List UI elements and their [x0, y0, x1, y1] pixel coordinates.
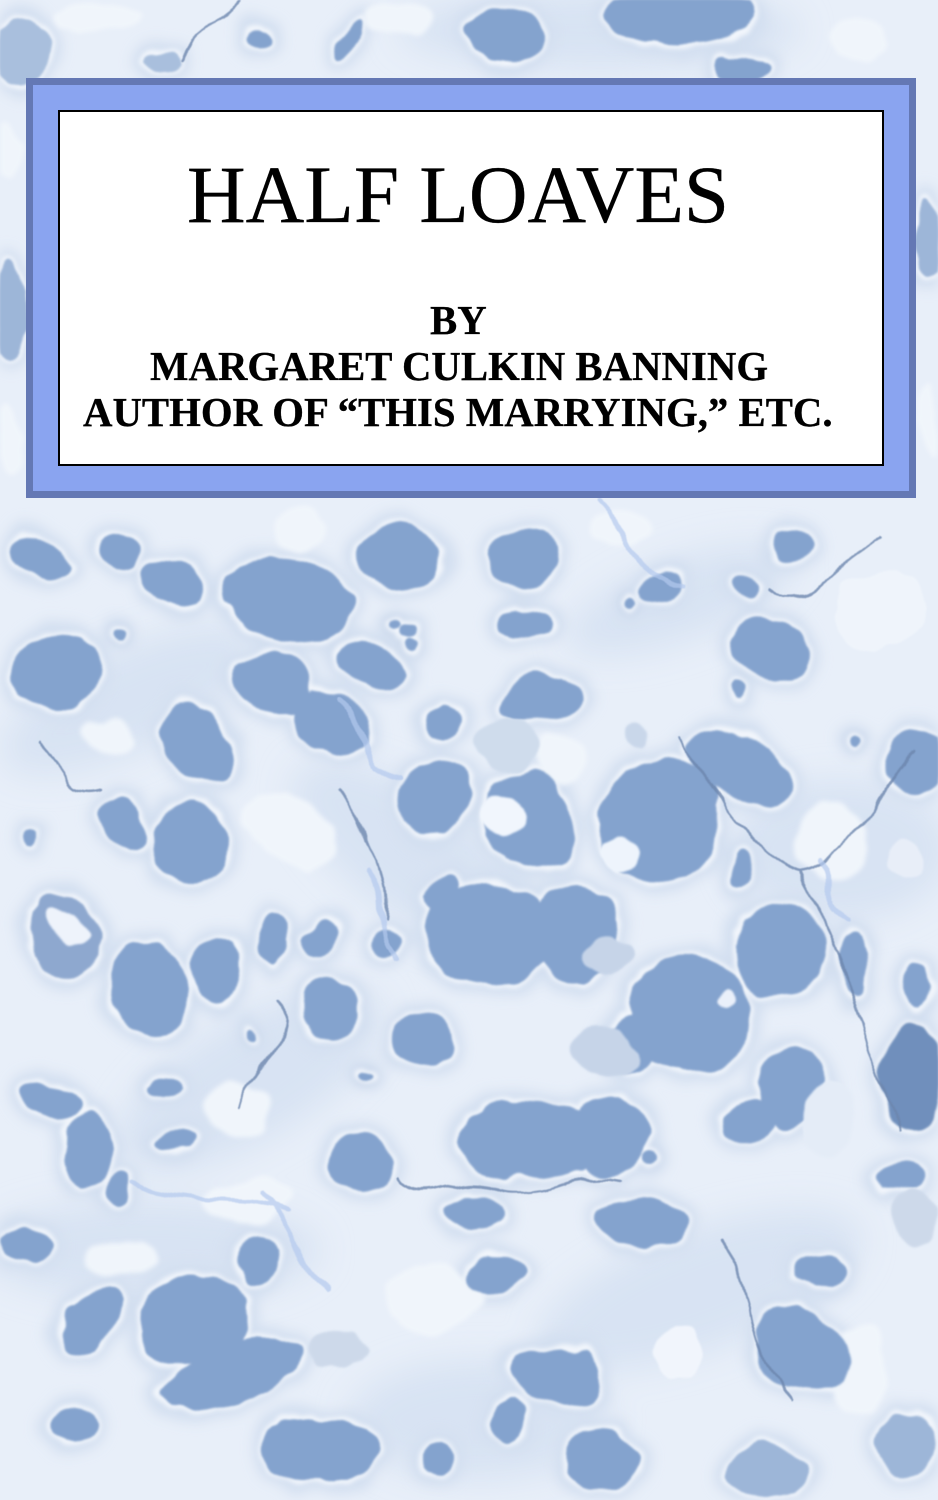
pale highlights inside blobs [37, 570, 937, 1385]
byline: by: BY [430, 298, 487, 343]
author name: MARGARET CULKIN BANNING [150, 344, 768, 389]
title panel: blue frame [26, 78, 916, 498]
title: HALF LOAVES [187, 150, 729, 240]
light blue marbling veins [130, 500, 850, 1290]
title panel: white plate [58, 110, 884, 466]
author credit: AUTHOR OF “THIS MARRYING,” ETC. [83, 390, 833, 435]
